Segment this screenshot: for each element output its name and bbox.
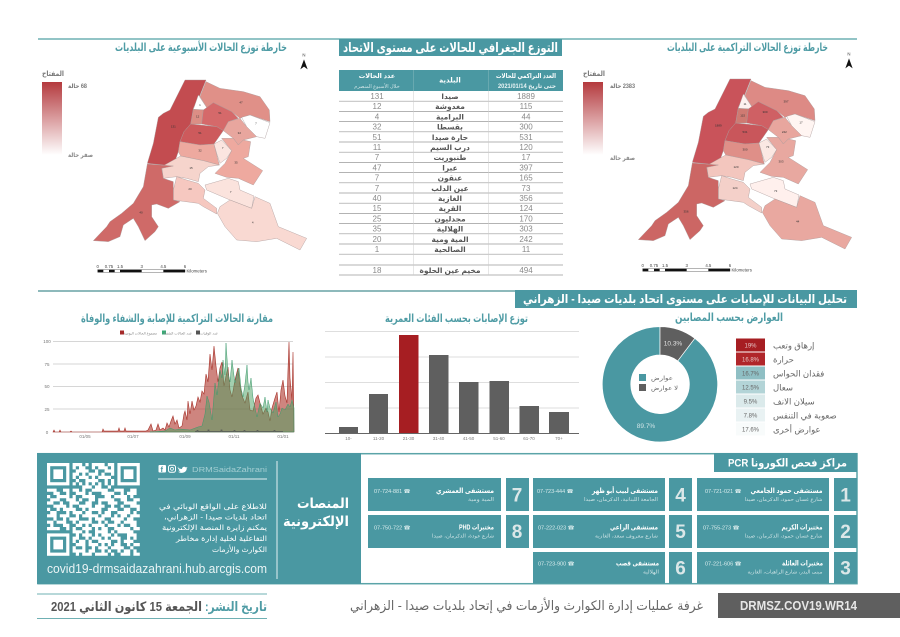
scale bar: 4.5 [160,264,167,269]
table rows: 47 [373,163,382,172]
scale bar: 0 [96,264,99,269]
map: cumulative cases by municipality: 44 [796,219,800,223]
map: weekly cases by municipality: 47 [239,100,243,104]
table rows: 73 [522,184,531,193]
north arrow: N [302,53,306,58]
symptom list: 12.5% [742,386,760,392]
centre 2: 2 [840,522,851,543]
table rows: صيدا [441,92,459,101]
centre 1: 07-721-021 ☎ [705,488,742,495]
panel: cumulative cases map [583,42,853,272]
table rows: المية ومية [431,235,469,244]
table rows: 356 [519,194,533,203]
table rows: 303 [519,225,533,234]
bar labels: 31-40 [433,436,445,441]
symptom list: حرارة [773,354,794,364]
map legend: weekly: المفتاح [42,71,64,78]
scale bar: Kilometers [186,268,207,273]
heading: online platforms: المنصات [297,495,349,511]
bar labels: 41-50 [463,436,475,441]
heading: PCR centres: مراكز فحص الكورونا PCR [728,458,847,470]
map legend: cumulative: صفر حالة [610,155,635,162]
heading: weekly map: خارطة توزع الحالات الأسبوعية على البلديات [115,40,287,54]
north arrow: N [847,52,851,57]
title: geographic distribution: التوزع الجغرافي للحالات على مستوى الاتحاد [343,40,558,55]
centre 4: مستشفى لبيب أبو ظهر [591,486,658,495]
map: cumulative cases by municipality: 11 [743,102,747,106]
centre 4: الجامعة اللبنانية، الدكرمان، صيدا [584,497,658,503]
table rows: 20 [373,235,382,244]
map: weekly cases by municipality: 12 [196,114,200,118]
panel: online platforms [37,453,361,584]
map: weekly cases by municipality: 7 [255,121,257,125]
chart legend: عدد الوفيات [200,332,218,336]
donut chart: 89.7% [637,423,655,430]
bar labels: 11-20 [373,436,385,441]
table rows: 44 [522,112,531,121]
table rows: مخيم عين الحلوة [419,266,481,275]
report code [718,593,900,618]
centre 3: مختبرات العائلة [782,560,823,568]
centre 8: 8 [512,522,522,543]
panel: cumulative comparison line chart [43,313,294,439]
centre 2: 07-755-273 ☎ [703,524,740,532]
scale bar: 3 [140,264,143,269]
symptom list: 16.8% [742,358,760,364]
centre 8: شارع عودة، الدكرمان، صيدا [432,534,494,540]
symptom list: عوارض أخرى [773,424,821,434]
centre 6 [533,552,692,584]
platform description: للاطلاع على الواقع الوبائي في [159,502,267,511]
map legend: cumulative: المفتاح [583,71,605,78]
bar labels: 21-30 [403,436,415,441]
map: weekly cases by municipality: 1 [199,103,201,107]
scale bar [641,263,752,272]
centre 7: المية ومية [468,497,494,503]
table rows: الصالحية [434,245,466,254]
centre 6: الهلالية [643,570,659,576]
table rows: 15 [373,204,382,213]
donut chart: 10.3% [664,340,682,348]
centre 5: شارع معروف سعد، الغازية [595,534,658,540]
map: cumulative cases by municipality: 17 [799,120,803,124]
table rows: 124 [519,204,533,213]
panel: symptoms [602,312,837,442]
scale bar: 1.5 [662,263,669,268]
chart legend: عدد الحالات الشفاء [164,332,192,336]
table rows: عين الدلب [431,184,469,193]
centre 1: 1 [840,486,851,506]
centre 1: مستشفى حمود الجامعي [750,488,822,495]
table rows: درب السيم [430,143,470,152]
table rows [370,92,535,275]
map legend: weekly: 68 حالة [68,83,88,90]
table rows: حارة صيدا [432,133,468,142]
bar labels [345,436,563,441]
social media handles: f [160,465,164,474]
map: cumulative cases by municipality: 300 [763,110,768,114]
bar labels: 51-60 [493,436,505,441]
heading: age groups: توزع الإصابات بحسب الفئات العمرية [385,313,528,325]
table: cases by municipality [339,70,563,275]
centre 6: مستشفى قصب [616,560,659,568]
scale bar [96,264,207,273]
map: weekly cases by municipality: 7 [222,146,224,150]
heading: symptoms: العوارض بحسب المصابين [675,312,783,324]
footer: operations room name: غرفة عمليات إدارة الكوارث والأزمات في إتحاد بلديات صيدا - الزهراني [350,597,703,614]
table rows: 115 [520,102,533,111]
north arrow [300,53,308,69]
map: cumulative cases by municipality: 124 [733,186,738,190]
panel: PCR test centres [368,453,857,584]
table rows: 165 [519,174,533,183]
map: cumulative cases by municipality: 356 [684,209,689,213]
table rows: القرية [439,204,461,213]
symptom list: 19% [744,344,757,350]
table rows: 7 [375,174,380,183]
symptom list [736,338,837,436]
centre 6: 6 [675,558,686,580]
table rows: 40 [373,194,382,203]
website url: covid19-drmsaidazahrani.hub.arcgis.com [47,562,267,576]
map: cumulative cases by municipality: 73 [766,145,770,149]
table header: العدد التراكمي للحالات [496,73,556,80]
map: weekly cases by municipality: 20 [188,187,192,191]
bar labels: 10- [345,436,352,441]
symptom list: 16.7% [742,372,760,378]
x axis labels: 01/01 [277,434,289,439]
scale bar: 6 [184,264,187,269]
map: weekly cases by municipality: 15 [189,166,193,170]
y axis labels: 0 [46,430,49,435]
table rows: 17 [522,153,531,162]
map: weekly cases by municipality: 4 [252,220,254,224]
symptom list: 17.6% [742,428,760,434]
table rows: طنبوريت [434,153,466,162]
symptom list: 7.8% [744,414,758,420]
panel: weekly cases map [42,40,308,273]
map: weekly cases by municipality: 32 [198,148,202,152]
table rows: الغازية [438,194,462,203]
symptom list: صعوبة في التنفس [773,410,837,420]
table rows: 120 [519,143,533,152]
table rows: بقسطا [437,123,463,132]
table header [339,70,563,91]
map: weekly cases by municipality: 7 [230,190,232,194]
map: weekly cases by municipality: 35 [234,160,238,164]
map: weekly cases by municipality [93,53,308,273]
map: weekly cases by municipality: 131 [171,125,176,129]
y axis labels: 100 [43,339,51,344]
scale bar: 3 [685,263,688,268]
centre 5: 07-222-023 ☎ [538,524,575,532]
centre 4: 4 [675,486,686,506]
centre 5: 5 [675,522,686,543]
map: weekly cases by municipality: 51 [218,111,222,115]
table rows: 1889 [517,92,535,101]
map: cumulative cases by municipality: 120 [734,165,739,169]
scale bar: 0 [641,263,644,268]
platform description: يمكنم زايرة المنصة الإلكترونية [162,523,267,532]
map: weekly cases by municipality: 40 [139,210,143,214]
x axis labels: 01/11 [229,434,240,439]
bar labels: 61-70 [523,436,535,441]
symptom list: إرهاق وتعب [773,340,814,352]
table rows: عبرا [442,163,458,172]
centre 8: 07-750-722 ☎ [374,524,411,532]
platform description: اتحاد بلديات صيدا - الزهراني، [164,512,267,522]
map: cumulative cases by municipality: 73 [774,189,778,193]
table rows: عنقون [438,174,462,183]
table rows: 35 [373,225,382,234]
y axis labels: 75 [44,362,50,367]
table rows: 25 [373,214,382,223]
centre 5 [533,515,692,548]
centre 7 [368,478,529,511]
chart legend [120,330,218,336]
map: cumulative cases by municipality: 303 [779,159,784,163]
heading: PCR centres [714,453,857,472]
x axis labels: 01/07 [127,434,139,439]
y axis labels: 50 [44,384,50,389]
symptom list: سيلان الانف [773,396,815,406]
scale bar: 6 [729,263,732,268]
donut chart: لا عوارض [651,385,678,392]
table rows: 397 [519,163,533,172]
table rows: 18 [373,266,382,275]
table rows: 7 [375,153,380,162]
centre 6: 07-723-900 ☎ [538,560,575,568]
centre 8 [368,515,529,548]
scale bar: 4.5 [705,263,712,268]
table rows: 242 [519,235,533,244]
map: weekly cases by municipality: 32 [238,131,241,135]
table rows: الهلالية [437,225,463,234]
table rows: مغدوشة [435,102,465,111]
centre 7: 07-724-881 ☎ [374,488,411,495]
scale bar: Kilometers [731,267,752,272]
heading: online platforms [283,495,349,530]
table header: حتى تاريخ 2021/01/14 [498,83,556,90]
table rows: 4 [375,112,380,121]
table rows: 11 [522,245,531,254]
table rows: 1 [375,245,380,254]
centre 2: مختبرات الكريم [782,524,822,532]
centre 3: مبنى البدر، شارع الراهبات، الغازية [748,570,823,576]
donut chart [602,327,718,442]
platform description: الكوارث والأزمات [212,544,267,554]
scale bar: 0.75 [650,263,659,268]
table header: خلال الأسبوع المنصرم [354,83,400,90]
map: cumulative cases by municipality: 242 [782,130,787,134]
map: cumulative cases by municipality: 115 [740,113,745,117]
x axis labels: 01/05 [79,434,91,439]
centre 2 [697,515,857,548]
heading: online platforms: الإلكترونية [283,513,349,530]
table rows: 12 [373,102,382,111]
heading: comparison chart: مقارنة الحالات التراكمية للإصابة والشفاء والوفاة [81,313,273,325]
heading: cumulative map: خارطة توزع الحالات التراكمية على البلديات [667,42,828,54]
social media handles [158,465,268,474]
y axis labels: 25 [44,407,50,412]
area chart [53,342,294,432]
centre 3: 07-221-606 ☎ [705,560,742,568]
social media handles: DRMSaidaZahrani [192,467,268,474]
centre 3 [697,552,857,584]
map: cumulative cases by municipality: 531 [743,130,748,134]
map: weekly cases by municipality: 51 [198,131,202,135]
x axis labels [79,434,289,439]
platform description: التفاعلية لخلية إدارة مخاطر [175,534,267,543]
table rows: مجدليون [434,214,466,223]
map legend: cumulative: 2383 حالة [610,83,636,90]
table rows: 170 [519,214,533,223]
symptom list: فقدان الحواس [773,368,824,378]
table rows: 11 [373,143,382,152]
table header: عدد الحالات [359,73,395,80]
publication date: الجمعة 15 كانون الثاني 2021 [51,599,202,614]
centre 1: شارع غسان حمود، الدكرمان، صيدا [744,497,822,503]
symptom list: 9.5% [744,400,758,406]
map: cumulative cases by municipality: 300 [743,147,748,151]
donut chart: عوارض [651,375,673,382]
table rows: 494 [519,266,533,275]
centre 7: مستشفى العمشري [436,488,494,495]
map legend: weekly: صفر حالة [68,152,93,159]
publication date: تاريخ النشر: [205,599,267,614]
map: cumulative cases by municipality: 1889 [715,124,722,128]
scale bar: 1.5 [117,264,124,269]
table header: البلدية [439,78,461,84]
bars [339,335,569,433]
QR code [47,465,140,554]
centre 1 [697,478,857,511]
centre 7: 7 [512,486,522,506]
centre 3: 3 [840,558,851,580]
publication date [37,594,267,618]
centre 2: شارع غسان حمود، الدكرمان، صيدا [744,534,822,540]
table rows: البرامية [436,112,464,121]
map legend: cumulative [583,71,636,162]
symptom list: سعال [773,382,793,392]
chart legend: مجموع الحالات اليومية [124,332,157,336]
map: cumulative cases by municipality: 397 [784,99,789,103]
centre 4 [533,478,692,511]
table rows: 51 [373,133,382,142]
table rows: 7 [375,184,380,193]
north arrow [845,52,853,68]
scale bar: 0.75 [105,264,114,269]
x axis labels: 01/09 [179,434,191,439]
table rows: 300 [519,123,533,132]
map: cumulative cases by municipality [638,52,853,272]
report code: DRMSZ.COV19.WR14 [740,599,857,613]
platform description [159,502,267,554]
centre 5: مستشفى الراعي [610,524,658,532]
centre 4: 07-723-444 ☎ [537,488,574,495]
table rows: 531 [519,133,533,142]
table rows: 131 [370,92,384,101]
map legend: weekly [42,71,93,159]
table rows: 32 [373,123,382,132]
panel: age group bar chart [325,313,579,441]
y axis labels [43,339,51,435]
centre 8: مختبرات PHD [459,524,494,532]
section title: data analysis: تحليل البيانات للإصابات على مستوى اتحاد بلديات صيدا - الزهراني [523,292,847,307]
bar labels: 70+ [555,436,563,441]
section title: data analysis [515,290,857,308]
